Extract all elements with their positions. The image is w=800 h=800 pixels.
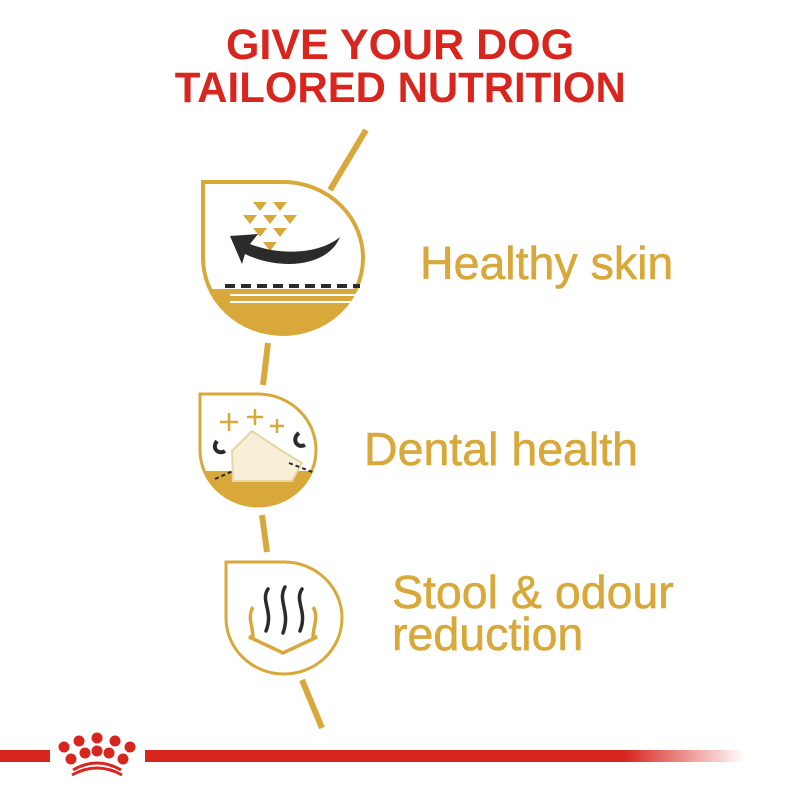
label: dental health: Dental health [364, 423, 638, 475]
icon: crown logo [58, 732, 136, 776]
label: stool & odour reduction: Stool & odour [392, 566, 674, 618]
icon: stool odour [224, 560, 344, 676]
icon: healthy skin [201, 180, 365, 336]
title: GIVE YOUR DOG [226, 21, 574, 69]
label: stool & odour reduction: reduction [392, 608, 583, 660]
label: stool & odour reduction [392, 566, 674, 660]
footer red line with crown [0, 732, 740, 776]
icon: dental health [198, 392, 318, 508]
title: TAILORED NUTRITION [174, 64, 626, 112]
label: healthy skin: Healthy skin [420, 237, 673, 289]
title [174, 21, 626, 112]
